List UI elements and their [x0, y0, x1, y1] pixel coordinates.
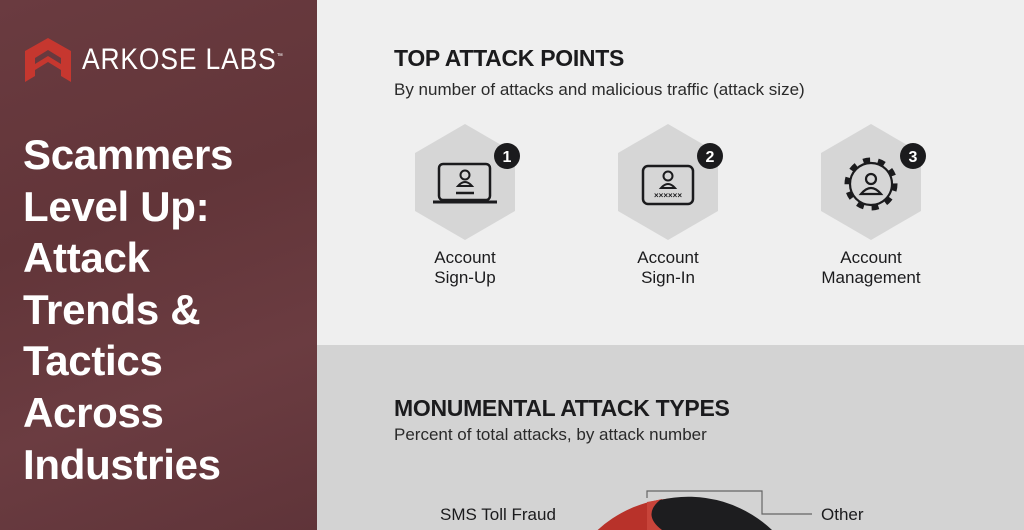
label: Account — [434, 248, 496, 267]
icon: arkose logo — [25, 38, 71, 82]
heading: TOP ATTACK POINTS — [394, 45, 624, 71]
heading: MONUMENTAL ATTACK TYPES — [394, 395, 730, 421]
label: Account — [840, 248, 902, 267]
logo text: ARKOSE LABS™ — [82, 43, 284, 76]
icon: login hex: ×××××× — [654, 191, 682, 200]
label: other: Other — [821, 505, 864, 524]
subtitle: Percent of total attacks, by attack number — [394, 425, 707, 444]
icon: laptop hex — [415, 124, 520, 240]
icon: gear hex: 3 — [909, 149, 918, 166]
label — [434, 248, 496, 287]
title: Level Up: — [23, 183, 209, 230]
title — [23, 131, 233, 488]
item: account sign-in — [618, 124, 723, 287]
item: account sign-up — [415, 124, 520, 287]
label: sms toll fraud: SMS Toll Fraud — [440, 505, 556, 524]
item: account management — [821, 124, 926, 287]
title: Trends & — [23, 286, 200, 333]
icon: login hex: 2 — [706, 149, 715, 166]
subtitle: By number of attacks and malicious traffic (attack size) — [394, 80, 805, 99]
pie chart — [598, 490, 812, 530]
label: Account — [637, 248, 699, 267]
panel: left title panel — [0, 0, 317, 530]
title: Across — [23, 389, 164, 436]
label — [637, 248, 699, 287]
icon: login hex — [618, 124, 723, 240]
label: Sign-Up — [434, 268, 496, 287]
label: Sign-In — [641, 268, 695, 287]
logo — [25, 38, 284, 82]
title: Scammers — [23, 131, 233, 178]
title: Attack — [23, 234, 150, 281]
title: Tactics — [23, 337, 163, 384]
icon: laptop hex: 1 — [503, 149, 512, 166]
label — [821, 248, 921, 287]
panel: top attack points — [317, 0, 1024, 345]
icon: gear hex — [821, 124, 926, 240]
label: Management — [821, 268, 921, 287]
title: Industries — [23, 441, 221, 488]
panel: monumental attack types — [317, 345, 1024, 530]
